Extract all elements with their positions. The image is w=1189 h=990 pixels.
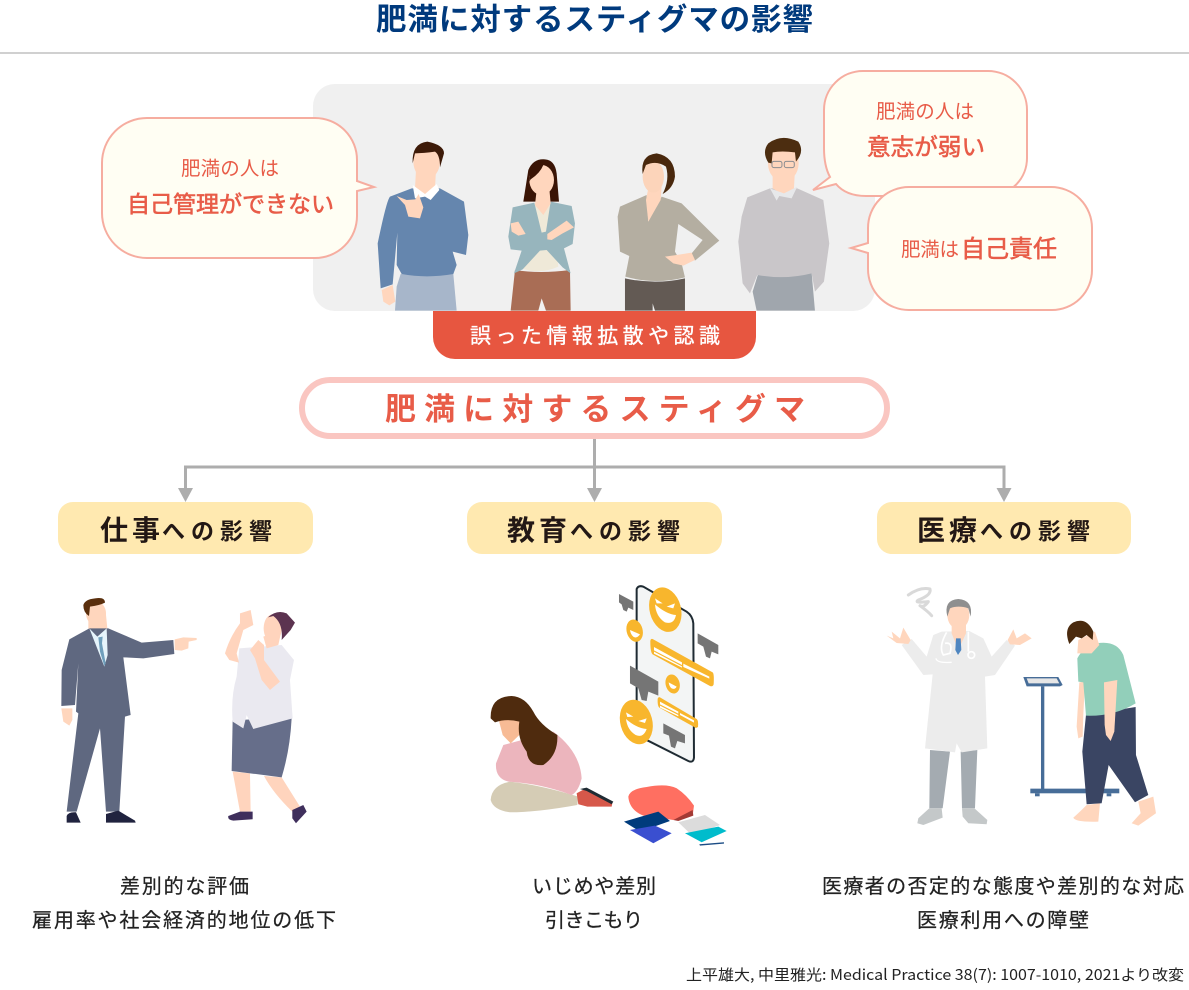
illustration: medical <box>887 588 1156 826</box>
man in suit pointing <box>61 598 197 823</box>
heading: work: への影響 <box>162 512 272 546</box>
speech bubble: left: 肥満の人は <box>181 152 279 181</box>
speech bubble: top right: 意志が弱い <box>867 128 985 162</box>
backpack and books <box>624 785 727 846</box>
caption: work: 雇用率や社会経済的地位の低下 <box>32 904 336 933</box>
banner: misinformation <box>433 311 756 359</box>
comment bars <box>650 639 714 728</box>
illustration: workplace <box>61 598 307 823</box>
stigma pill <box>302 380 887 436</box>
caption: medical: 医療利用への障壁 <box>917 904 1089 933</box>
heading: work: 仕事 <box>100 509 160 549</box>
scale <box>1023 677 1119 796</box>
thumbs down icons <box>619 594 718 748</box>
speech bubble: bottom right: 肥満は <box>901 233 959 262</box>
illustration: school bullying <box>491 584 727 846</box>
caption: education <box>532 870 656 933</box>
person: man with glasses <box>738 138 829 311</box>
woman recoiling <box>225 610 307 823</box>
caption: work: 差別的な評価 <box>120 870 249 899</box>
heading: medical <box>877 502 1131 554</box>
person: pointing man <box>378 142 468 311</box>
confusion scribble <box>908 588 932 616</box>
heading: education: 教育 <box>507 509 567 549</box>
caption: education: 引きこもり <box>545 904 643 933</box>
stigma pill: 肥満に対するスティグマ <box>385 384 805 429</box>
patient <box>1067 621 1156 826</box>
illustration: four people <box>378 138 829 311</box>
speech bubble: top right: 肥満の人は <box>876 95 974 124</box>
heading: medical: 医療 <box>917 509 977 549</box>
caption: education: いじめや差別 <box>532 870 656 899</box>
crouching girl <box>491 696 613 812</box>
laughing emoji faces <box>615 584 686 748</box>
person: woman with hand on hip <box>618 153 719 311</box>
heading: education: への影響 <box>570 512 680 546</box>
speech bubble: top right <box>813 71 1027 196</box>
doctor <box>887 599 1032 825</box>
citation: 上平雄大, 中里雅光: Medical Practice 38(7): 1007-1010, 2021より改変 <box>686 964 1184 985</box>
caption: medical <box>822 870 1184 933</box>
arrows <box>178 439 1012 502</box>
person: woman with crossed arms <box>508 159 575 311</box>
banner: misinformation: 誤った情報拡散や認識 <box>470 320 720 350</box>
phone <box>637 586 694 762</box>
speech bubble: left <box>102 118 374 258</box>
caption: work <box>32 870 336 933</box>
heading: medical: への影響 <box>980 512 1090 546</box>
heading: education <box>467 502 722 554</box>
panel: gray backdrop <box>313 84 875 311</box>
heading: work <box>58 502 313 554</box>
speech bubble: bottom right: 自己責任 <box>961 229 1057 264</box>
speech bubble: left: 自己管理ができない <box>127 185 334 219</box>
speech bubble: bottom right <box>851 187 1092 310</box>
caption: medical: 医療者の否定的な態度や差別的な対応 <box>822 870 1184 899</box>
